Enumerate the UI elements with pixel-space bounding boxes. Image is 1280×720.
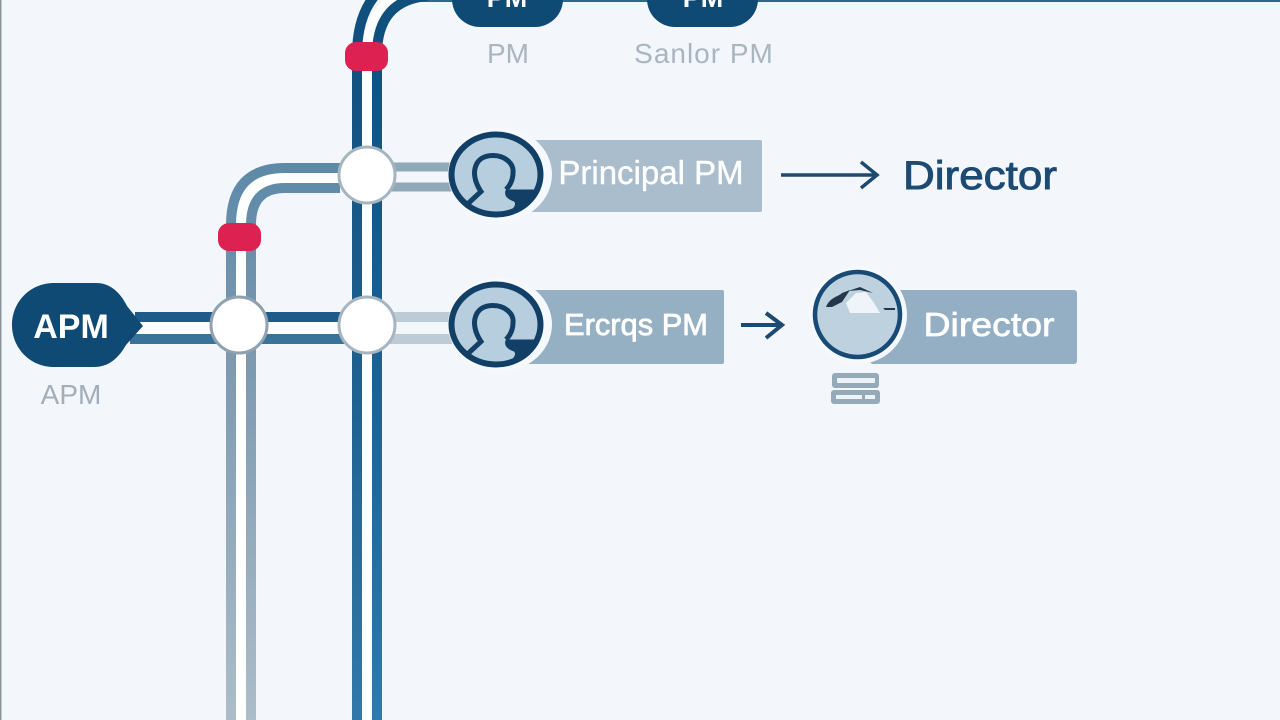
- red marker: upper: [345, 42, 388, 71]
- Director banner: Director: [924, 306, 1054, 343]
- junction: upper right: [339, 147, 395, 203]
- Director banner: [870, 290, 1077, 364]
- arrow: Principal PM to Director: [781, 162, 877, 188]
- APM node: [12, 283, 143, 367]
- track: long outer line pair: [357, 0, 428, 720]
- heading: Director: Director: [903, 154, 1057, 198]
- track: left line pair: [231, 168, 340, 720]
- junction: lower right: [339, 297, 395, 353]
- Ercrqs PM banner: [520, 290, 724, 364]
- label: PM: PM: [487, 38, 529, 69]
- Principal PM banner: Principal PM: [558, 154, 744, 191]
- icon: Principal PM person: [448, 128, 552, 222]
- APM node: APM: [33, 308, 109, 346]
- track: horizontal line from APM: [130, 317, 452, 339]
- PM node: [452, 0, 563, 27]
- junction: lower left: [211, 297, 267, 353]
- label: Senior PM: Sanlor PM: [634, 38, 774, 69]
- Principal PM banner: [520, 140, 762, 212]
- Ercrqs PM banner: Ercrqs PM: [564, 307, 708, 342]
- Senior PM node: [647, 0, 758, 27]
- red marker: lower: [218, 223, 261, 251]
- icon: stacked device: [831, 373, 880, 404]
- icon: Director mountain: [809, 266, 907, 364]
- icon: Ercrqs PM person: [448, 278, 552, 372]
- track: branch to Principal PM: [390, 167, 452, 187]
- arrow: Ercrqs PM to Director: [741, 313, 782, 338]
- label: APM: APM: [41, 379, 101, 410]
